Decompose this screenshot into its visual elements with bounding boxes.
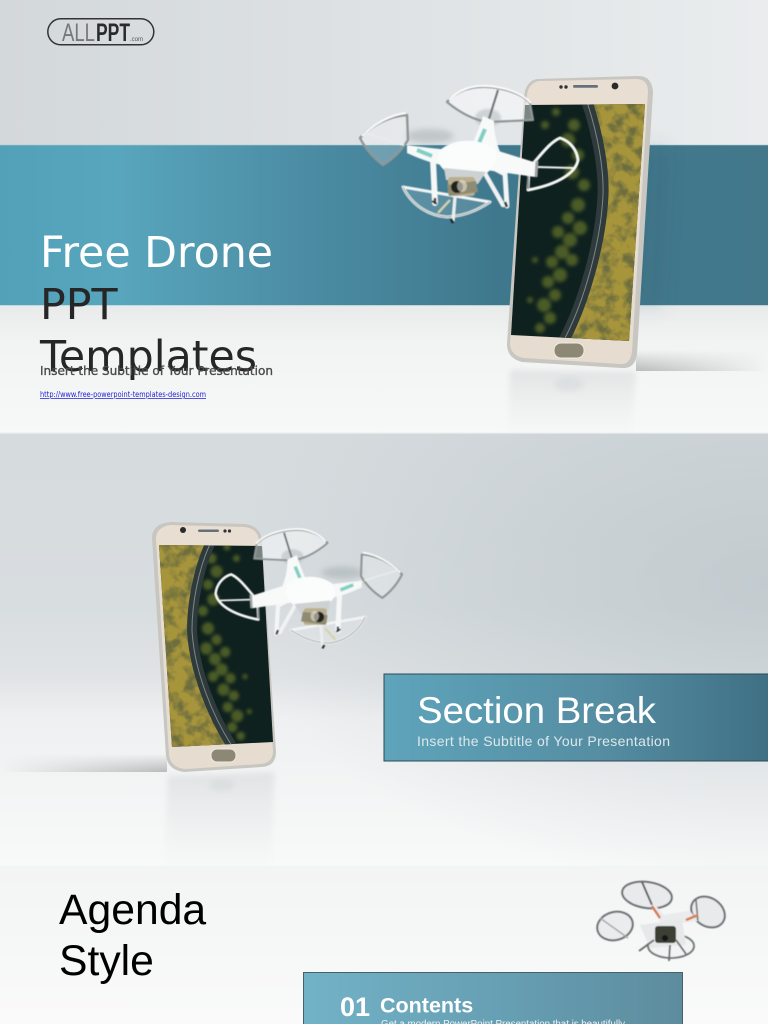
title: Free Drone PPT Templates — [39, 228, 273, 382]
slide 2 background — [0, 432, 768, 866]
subtitle: Insert the Subtitle of Your Presentation — [40, 364, 273, 378]
title: Free Drone PPT Templates: PPT — [40, 280, 118, 330]
heading: Agenda Style: Style — [59, 937, 154, 985]
drone, slide 3 — [594, 879, 731, 961]
logo: ALLPPT: PPT — [96, 19, 130, 47]
slide 1 background — [0, 0, 768, 433]
drone, slide 2 — [216, 529, 402, 648]
contents heading: Contents — [380, 994, 473, 1018]
phone screen with aerial road — [511, 104, 645, 341]
title: Free Drone PPT Templates: Free Drone — [40, 228, 273, 278]
contents panel — [304, 972, 682, 1024]
contents number: 01 — [340, 992, 370, 1022]
slide 3 background — [0, 866, 768, 1024]
logo: ALLPPT: ALL — [62, 19, 95, 47]
phone shadow and reflection, slide 1 — [510, 142, 750, 400]
section break subtitle: Insert the Subtitle of Your Presentation — [417, 733, 670, 749]
drone, slide 1 — [360, 86, 578, 223]
logo: ALLPPT — [48, 19, 154, 47]
phone screen with aerial road — [159, 545, 273, 747]
phone, slide 2 — [150, 522, 280, 772]
link: http://www.free-powerpoint-templates-design.com — [40, 390, 206, 399]
logo: ALLPPT: .com — [130, 37, 143, 43]
title: Free Drone PPT Templates: Templates — [39, 332, 257, 382]
section break panel — [384, 674, 768, 761]
heading: Agenda Style: Agenda — [59, 886, 206, 934]
section break heading: Section Break — [417, 690, 657, 731]
phone, slide 1 — [505, 76, 653, 368]
heading: Agenda Style — [59, 886, 206, 985]
phone shadow and reflection, slide 2 — [23, 756, 274, 816]
